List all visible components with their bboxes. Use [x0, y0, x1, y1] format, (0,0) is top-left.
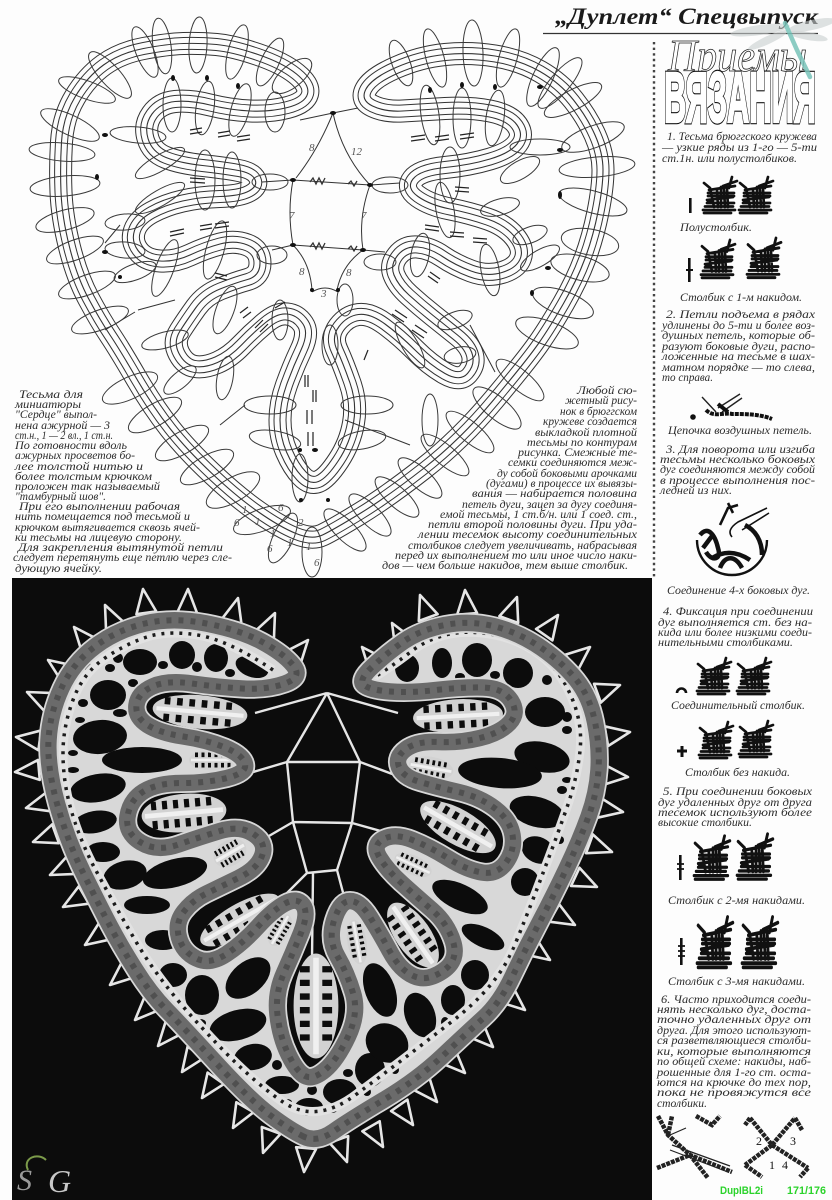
- text block: step 2: то справа.: [662, 372, 713, 384]
- dotted column divider: [653, 42, 655, 578]
- diagram numbers: 12: [351, 146, 362, 158]
- text block: Bruges lace description (right): дов — чем больше накидов, тем выше столбик.: [382, 560, 628, 572]
- text block: step 6: ки, которые выполняются: [657, 1046, 811, 1058]
- text block: Bruges lace description (right): вания — набирается половина: [472, 488, 637, 500]
- diagram numbers: 7: [361, 210, 367, 222]
- icon: branching stitch, working: [657, 1116, 732, 1178]
- text block: step 1: ст.1н. или полустолбиков.: [662, 153, 797, 165]
- fishbone fillings inside cord loops: [140, 691, 504, 1058]
- diagram numbers: 7: [289, 210, 295, 222]
- text block: step 2: ложенные на тесьме в шах-: [661, 351, 815, 363]
- diagram numbers: 6: [267, 543, 273, 555]
- caption: slip stitch: Соединительный столбик.: [671, 699, 805, 712]
- text block: tape description (left): более толстым крючком: [15, 471, 153, 483]
- panel: lace diagram: [28, 17, 636, 577]
- text block: step 2: удлинены до 5-ти и более воз-: [661, 320, 815, 332]
- text block: tape description (left): "Сердце" выпол-: [15, 409, 97, 421]
- text block: step 1: [661, 131, 817, 165]
- text block: step 4: 4. Фиксация при соединении: [663, 606, 813, 618]
- icon: joining four side arcs: [697, 503, 769, 575]
- text block: Bruges lace description (right): жетный рису-: [565, 394, 637, 407]
- header rule: [543, 32, 818, 34]
- text block: step 3: в процессе выполнения пос-: [660, 475, 815, 487]
- logo: bottom-left: G: [48, 1163, 71, 1199]
- text block: tape description (left): Тесьма для: [19, 389, 83, 401]
- logo: bottom-left: [17, 1156, 71, 1199]
- text block: Bruges lace description (right): тесьмы по контурам: [527, 437, 638, 449]
- icon: single crochet: [677, 721, 773, 758]
- page number: 171/176: [787, 1185, 826, 1197]
- text block: step 3: 3. Для поворота или изгиба: [665, 444, 815, 456]
- text block: step 5: высокие столбики.: [658, 817, 752, 829]
- caption: single crochet: Столбик без накида.: [685, 767, 790, 779]
- caption: double crochet: Столбик с 1-м накидом.: [680, 292, 802, 304]
- diagram numbers: 1: [242, 504, 248, 516]
- text block: step 2: душных петель, которые об-: [662, 330, 815, 342]
- text block: step 2: матном порядке — то слева,: [661, 362, 815, 374]
- text block: tape description (left): нить помещается под тесьмой и: [15, 510, 190, 523]
- text block: step 3: тесьмы несколько боковых: [660, 454, 816, 466]
- diagram numbers: 8: [346, 267, 352, 279]
- text block: tape description (left): ки тесьмы на лицевую сторону.: [15, 532, 182, 544]
- text block: step 5: дуг удаленных друг от друга: [658, 797, 812, 809]
- text block: step 2: разуют боковые дуги, распо-: [661, 341, 815, 353]
- text block: step 6: ся разветвляющиеся столби-: [657, 1035, 811, 1047]
- text block: tape description (left): следует перетянуть еще петлю через сле-: [13, 552, 232, 564]
- text block: step 3: [659, 444, 816, 497]
- text block: Bruges lace description (right): рисунка. Смежные те-: [517, 447, 637, 459]
- diagram numbers: 6: [278, 502, 284, 514]
- text block: step 6: по общей схеме: накиды, наб-: [657, 1055, 811, 1068]
- text block: step 6: пока не провяжутся все: [657, 1087, 811, 1099]
- picot triangles on outer edge: [14, 588, 632, 1173]
- ladder ring inside outer cord: [63, 632, 581, 1112]
- node dots: [95, 75, 563, 502]
- central star bars: [243, 693, 403, 960]
- joining stitch marks: [170, 128, 487, 446]
- text block: step 3: дуг соединяются между собой: [660, 463, 815, 476]
- text block: step 1: — узкие ряды из 1-го — 5-ти: [661, 142, 817, 154]
- text block: Bruges lace description (right): перед их выполнением то или иное число наки-: [395, 550, 637, 562]
- text block: step 6: друга. Для этого используют-: [657, 1025, 811, 1037]
- icon: double crochet one yarn over: [686, 238, 781, 282]
- diagram numbers: 8: [309, 142, 315, 154]
- icon: branching stitch, finished: 2: [756, 1134, 762, 1148]
- diagram numbers: 1: [306, 541, 312, 553]
- icon: half double stitch: [689, 177, 773, 213]
- text block: tape description (left): "тамбурный шов".: [15, 490, 106, 503]
- text block: tape description (left): крючком вытягивается сквозь ячей-: [15, 521, 200, 534]
- panel: photo of crocheted lace heart: [12, 578, 652, 1200]
- text block: step 6: ются на крючке до тех пор,: [657, 1077, 811, 1089]
- icon: chain stitch: [690, 394, 772, 420]
- outer and inner braid tape: [61, 43, 603, 537]
- text block: tape description (left): проложен так называемый: [15, 480, 160, 493]
- diagram numbers: 1: [255, 516, 260, 528]
- icon: slip stitch: [677, 658, 771, 694]
- side arcs around the heart: [28, 17, 636, 577]
- caption: chain stitch: Цепочка воздушных петель.: [667, 425, 812, 437]
- text block: step 1: 1. Тесьма брюггского кружева: [667, 131, 817, 143]
- text block: step 4: нительными столбиками.: [658, 637, 793, 649]
- text block: step 4: [658, 606, 813, 649]
- text block: step 4: дуг выполняется ст. без на-: [658, 617, 812, 629]
- text block: step 2: [661, 309, 816, 384]
- text block: tape description (left): нена ажурной — 3: [15, 419, 110, 432]
- text block: step 3: ледней из них.: [659, 484, 732, 497]
- icon: branching stitch, finished: [745, 1118, 808, 1177]
- text block: tape description (left): ст.н., 1 — 2 вл., 1 ст.н.: [15, 430, 113, 442]
- text block: tape description (left): лее толстой нитью и: [14, 460, 143, 473]
- text block: step 6: столбики.: [657, 1098, 707, 1110]
- diagram numbers: 1: [270, 528, 276, 540]
- title: script line: Приемы: [667, 30, 807, 81]
- text block: tape description (left): Для закрепления вытянутой петли: [17, 541, 223, 554]
- text block: tape description (left): При его выполнении рабочая: [18, 501, 180, 513]
- text block: step 6: [656, 994, 811, 1110]
- text block: Bruges lace description (right): лении тесемок высоту соединительных: [417, 529, 638, 541]
- diagram numbers: [234, 142, 367, 569]
- text block: Bruges lace description (right): столбиков следует увеличивать, набрасывая: [408, 540, 637, 552]
- text block: Bruges lace description (right): (дугами) в процессе их вывязы-: [486, 478, 637, 490]
- text block: Bruges lace description (right): емой тесьмы, 1 ст.б/н. или 1 соед. ст.,: [440, 508, 637, 521]
- text block: Bruges lace description (right): нок в брюггском: [560, 406, 638, 418]
- text block: tape description (left): дующую ячейку.: [15, 562, 102, 575]
- text block: step 5: 5. При соединении боковых: [663, 786, 813, 798]
- diagram numbers: 1: [287, 537, 292, 549]
- text block: Bruges lace description (right): Любой сю-: [576, 384, 637, 397]
- text block: Bruges lace description (right): [382, 384, 638, 572]
- icon: treble three yarn overs: [678, 917, 778, 967]
- icon: treble two yarn overs: [677, 834, 773, 880]
- diagram numbers: 8: [299, 266, 305, 278]
- text block: step 6: рошенные для 1-го ст. оста-: [656, 1067, 811, 1079]
- header: magazine name: „Дуплет“ Спецвыпуск: [555, 4, 820, 29]
- icon: branching stitch, finished: 4: [782, 1158, 788, 1172]
- text block: Bruges lace description (right): семки соединяются меж-: [508, 457, 637, 469]
- diagram numbers: 2: [298, 517, 304, 529]
- caption: half double: Полустолбик.: [679, 222, 752, 234]
- text block: step 5: тесемок используют более: [658, 807, 812, 819]
- footer code: DupIBL2i: [720, 1185, 763, 1197]
- caption: joining four arcs: Соединение 4-х боковых дуг.: [667, 585, 810, 597]
- lace ground: [48, 620, 599, 1139]
- text block: tape description (left): [13, 389, 232, 575]
- diagram numbers: 6: [314, 557, 320, 569]
- text block: tape description (left): ажурных просветов бо-: [15, 450, 135, 462]
- cord outlining the heart: [48, 620, 599, 1139]
- text block: Bruges lace description (right): петель дуги, зацеп за дугу соединя-: [462, 499, 637, 511]
- text block: step 4: кида или более низкими соеди-: [658, 627, 812, 639]
- text block: step 6: 6. Часто приходится соеди-: [661, 994, 811, 1006]
- text block: Bruges lace description (right): кружеве создается: [543, 416, 637, 428]
- logo: bottom-left: S: [17, 1164, 32, 1197]
- icon: branching stitch, finished: 3: [790, 1134, 796, 1148]
- central star connecting bars: [105, 108, 495, 445]
- text block: step 6: точно удаленных друг от: [657, 1014, 811, 1026]
- text block: Bruges lace description (right): ду собой боковыми арочками: [497, 467, 637, 480]
- diagram numbers: 3: [320, 288, 327, 300]
- text block: step 6: нять несколько дуг, доста-: [657, 1004, 811, 1016]
- caption: three yarn overs: Столбик с 3-мя накидами.: [668, 976, 805, 988]
- open cells of the lace: [67, 641, 573, 1116]
- text block: step 5: [658, 786, 813, 829]
- text block: Bruges lace description (right): петли второй половины дуги. При уда-: [428, 518, 637, 531]
- caption: two yarn overs: Столбик с 2-мя накидами.: [668, 895, 805, 907]
- icon: branching stitch, finished: 1: [769, 1158, 775, 1172]
- text block: tape description (left): По готовности вдоль: [14, 440, 127, 452]
- icon: dragonfly: [730, 15, 832, 77]
- diagram numbers: 6: [234, 517, 240, 529]
- text block: Bruges lace description (right): выкладкой плотной: [535, 426, 637, 439]
- text block: tape description (left): миниатюры: [14, 399, 81, 411]
- text block: step 2: 2. Петли подъема в рядах: [666, 309, 816, 321]
